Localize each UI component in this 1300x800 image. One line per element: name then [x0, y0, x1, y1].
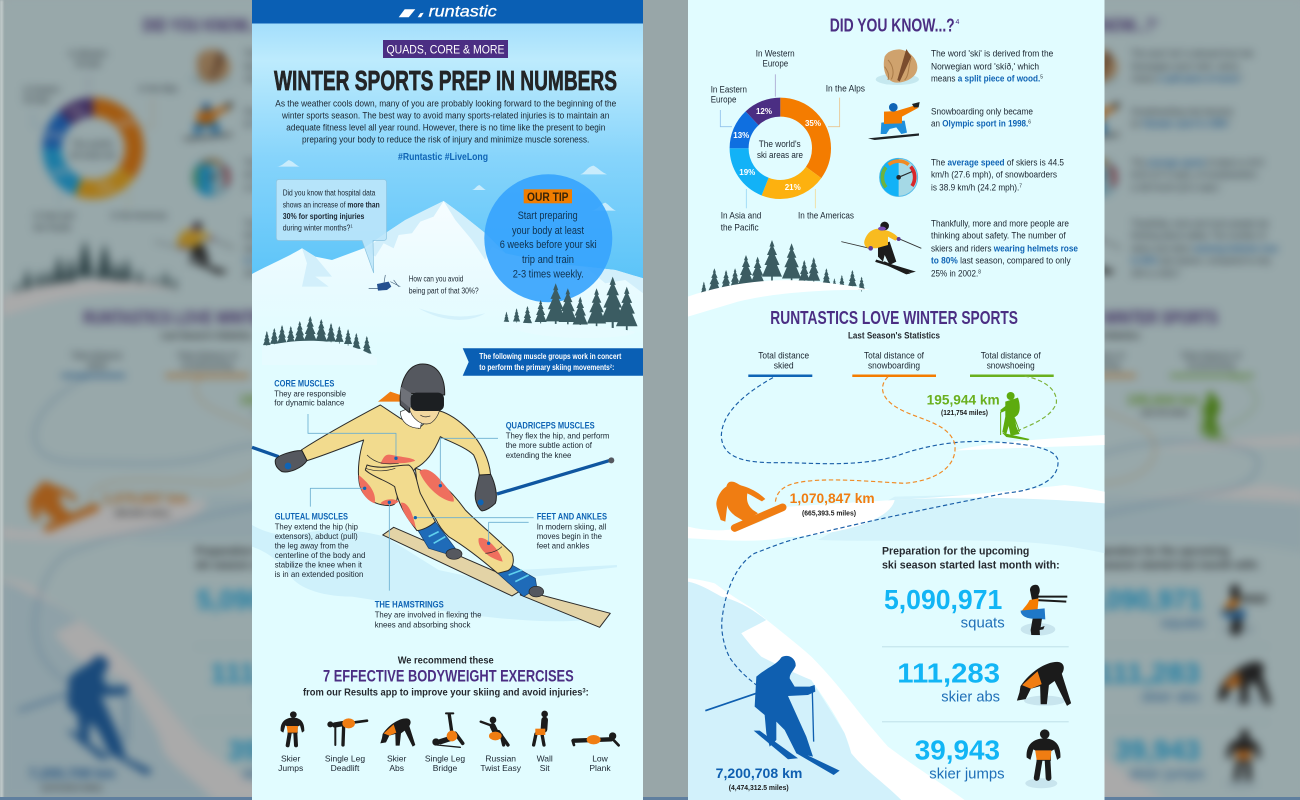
exercise labels: Abs [389, 763, 404, 773]
heading: recommended exercises: We recommend these [398, 655, 494, 667]
label: feet and ankles: FEET AND ANKLES [537, 512, 607, 523]
fact: helmets: Thankfully, more and more people are [931, 219, 1069, 229]
title: did you know: 4 [956, 19, 960, 26]
chart: ski areas donut: 12% [756, 107, 772, 116]
icon: snowboarder [868, 102, 920, 140]
stat: squats: 5,090,971 [884, 584, 1002, 615]
fact: origin of ski: The word 'ski' is derived from the [931, 49, 1053, 59]
fact: origin of ski [931, 49, 1053, 84]
fact: helmets: 8 [978, 269, 981, 275]
text: preparation heading: Preparation for the upcoming [882, 546, 1029, 558]
banner: muscle groups: : [612, 363, 614, 372]
banner: muscle groups: The following muscle groups work in concert [479, 352, 622, 361]
distance category labels: skied [774, 361, 794, 371]
fact: helmets: skiers and riders wearing helmets rose [931, 244, 1078, 254]
exercise labels: Skier [387, 754, 407, 764]
icon: snowboarder silhouette [716, 482, 783, 528]
fact: olympic sport: 6 [1028, 120, 1031, 126]
banner: muscle groups [463, 348, 643, 376]
exercise labels: Single Leg [425, 754, 465, 764]
exercise labels [278, 754, 611, 773]
text: preparation heading [882, 546, 1060, 572]
figure: single leg deadlift [328, 718, 367, 745]
exercise labels: Low [592, 754, 609, 764]
chart: ski areas donut: 35% [805, 119, 821, 128]
label: feet and ankles [537, 512, 607, 551]
panel: our tip circle: 2-3 times weekly. [513, 269, 584, 281]
skis [383, 527, 610, 627]
stat: snowshoeing distance: 195,944 km [927, 392, 1000, 407]
fact: average speed: 7 [1019, 184, 1022, 190]
chart: ski areas donut: 21% [785, 183, 801, 192]
stat: snowshoeing distance [927, 392, 1000, 417]
label: gluteal muscles: is in an extended position [275, 569, 364, 579]
icon: big skier silhouette [705, 656, 840, 775]
label: gluteal muscles [275, 512, 366, 579]
icon: snowshoer silhouette [1000, 392, 1030, 440]
logo: runtastic [399, 4, 497, 21]
stat: snowboarding distance: 1,070,847 km [790, 491, 875, 506]
panel: our tip circle: Start preparing [518, 210, 578, 222]
chart: ski areas donut: The world's [759, 139, 801, 149]
intro paragraph: preparing your body to reduce the risk of injury and minimize muscle soreness. [302, 135, 589, 145]
stat: skiing distance [716, 766, 802, 792]
label: gluteal muscles: They extend the hip (hip [275, 522, 358, 532]
callout: hospital data bubble [276, 180, 386, 273]
badge: quads, core and more: QUADS, CORE & MORE [386, 42, 504, 56]
fact: olympic sport [931, 107, 1033, 129]
scene: mountains and clouds [252, 160, 643, 347]
label: the hamstrings: They are involved in flexing the [375, 610, 482, 620]
snow shadow [252, 525, 585, 621]
donut labels and leaders: the Pacific [721, 223, 759, 233]
exercise labels: Jumps [278, 763, 303, 773]
icon: helmeted skier [841, 222, 921, 274]
fact: average speed: is 38.9 km/h (24.2 mph). [931, 183, 1028, 193]
intro paragraph: As the weather cools down, many of you are probably looking forward to the beginning of the [275, 99, 616, 109]
illustration: skier with muscle groups [252, 364, 617, 627]
exercise labels: Twist Easy [480, 763, 522, 773]
stat: skier abs [897, 658, 1000, 705]
distance category labels: Total distance of [864, 351, 924, 361]
stat: skier jumps: 39,943 [915, 734, 1000, 765]
hashtags: #Runtastic #LiveLong [398, 152, 488, 163]
exercise labels: Deadlift [331, 763, 360, 773]
stat: skiing distance: 7,200,708 km [716, 766, 802, 781]
icon: skier jumps figure [1025, 729, 1060, 788]
stat: skier abs: skier abs [941, 689, 1000, 705]
label: core muscles [274, 379, 346, 408]
donut labels and leaders: In the Alps [826, 84, 865, 94]
chart: ski areas donut: 19% [739, 168, 755, 177]
stat: snowboarding distance [790, 491, 875, 518]
exercise labels: Skier [281, 754, 301, 764]
muscle highlights [359, 455, 503, 562]
exercise labels: Sit [540, 763, 550, 773]
label: core muscles: CORE MUSCLES [274, 379, 334, 390]
icon: split wood [876, 49, 919, 85]
label: core muscles: They are responsible [274, 389, 346, 399]
intro paragraph: winter sports season. The best way to avoid many sports-related injuries is to maintain an [281, 111, 609, 121]
panel: our tip circle: your body at least [512, 225, 584, 237]
callout: hospital data bubble: 30% for sporting injuries [283, 212, 365, 221]
fact: origin of ski: 5 [1040, 75, 1043, 81]
donut labels and leaders: In the Americas [798, 211, 854, 221]
donut labels and leaders: Europe [711, 95, 736, 105]
bent leg [365, 465, 435, 531]
figure: wall sit [534, 711, 548, 745]
distance category labels: Total distance [758, 351, 809, 361]
trees: right cluster [504, 277, 638, 338]
chart: ski areas donut: 13% [733, 131, 749, 140]
label: quadriceps muscles [506, 421, 609, 460]
stat: skier abs: 111,283 [897, 658, 1000, 689]
icon: squat figure [1021, 585, 1067, 636]
text: preparation heading: ski season started last month with: [882, 560, 1060, 572]
figure: skier abs [380, 718, 415, 747]
label: the hamstrings [375, 600, 482, 630]
stat: skier jumps: skier jumps [929, 766, 1005, 782]
fact: average speed [931, 158, 1064, 193]
donut labels and leaders: In Eastern [711, 85, 747, 95]
label: feet and ankles: feet and ankles [537, 541, 589, 551]
label: gluteal muscles: the leg away from the [275, 541, 349, 551]
chart: ski areas donut: ski areas are [757, 150, 803, 160]
heading: recommended exercises [303, 655, 589, 699]
ski poles [252, 447, 614, 494]
callout: hospital data bubble: shows an increase of more than [283, 200, 380, 209]
donut labels and leaders [711, 49, 865, 233]
callout: hospital data bubble: Did you know that hospital data [283, 189, 376, 198]
connector lines [308, 414, 534, 591]
label: the hamstrings: THE HAMSTRINGS [375, 600, 444, 611]
heading: recommended exercises: : [586, 687, 589, 699]
stat: skiing distance: (4,474,312.5 miles) [729, 785, 789, 792]
heading: recommended exercises: 7 EFFECTIVE BODYWEIGHT EXERCISES [323, 668, 574, 686]
fact: origin of ski: Norwegian word 'skíð,' which [931, 62, 1039, 72]
label: gluteal muscles: centerline of the body and [275, 550, 366, 560]
label: gluteal muscles: extensors), abduct (pull) [275, 531, 358, 541]
sky background [252, 23, 643, 293]
fact: helmets [931, 219, 1078, 278]
title: did you know: DID YOU KNOW...? [830, 15, 955, 36]
header band [252, 0, 643, 24]
stat: skier jumps [915, 734, 1005, 782]
exercise labels: Single Leg [325, 754, 365, 764]
heading: runtastics love winter sports [770, 308, 1018, 341]
heading: runtastics love winter sports: Last Season's Statistics [848, 331, 940, 341]
panel: our tip circle: OUR TIP [527, 190, 568, 204]
fact: helmets: 25% in 2002. [931, 268, 984, 278]
banner: muscle groups: 2 [610, 364, 612, 370]
trees: right panel cluster with snow crest [688, 240, 870, 317]
distance category labels: Total distance of [981, 351, 1041, 361]
banner: muscle groups: to perform the primary skiing movements [479, 363, 637, 372]
panel: right, did you know and statistics [688, 0, 1105, 800]
divider [882, 646, 1069, 647]
stat: squats [884, 584, 1005, 631]
intro paragraph [275, 99, 616, 145]
distance category labels: snowshoeing [987, 361, 1035, 371]
icons: did you know facts [841, 49, 921, 274]
panel: our tip circle: trip and train [522, 254, 574, 266]
label: feet and ankles: In modern skiing, all [537, 522, 607, 532]
exercise labels: Plank [589, 763, 611, 773]
snow background shapes [688, 435, 1105, 800]
heading: runtastics love winter sports: RUNTASTICS LOVE WINTER SPORTS [770, 308, 1018, 328]
text: avoid being part: being part of that 30%? [409, 286, 479, 295]
exercise labels: Bridge [433, 763, 458, 773]
label: gluteal muscles: GLUTEAL MUSCLES [275, 512, 348, 523]
icon: fallen skier [369, 275, 400, 291]
chart: ski areas donut [733, 107, 822, 192]
distance category labels: snowboarding [868, 361, 920, 371]
label: feet and ankles: moves begin in the [537, 531, 602, 541]
fact: average speed: km/h (27.6 mph), of snowboarders [931, 170, 1057, 180]
boots [418, 522, 537, 597]
fact: helmets: to 80% last season, compared to only [931, 256, 1071, 266]
gloves [275, 451, 307, 472]
panel: our tip circle: 6 weeks before your ski [500, 239, 597, 251]
label: quadriceps muscles: QUADRICEPS MUSCLES [506, 421, 595, 432]
donut labels and leaders: In Western [756, 49, 795, 59]
exercise labels: Russian [485, 754, 516, 764]
trees: left cluster [262, 316, 377, 365]
exercise labels: Wall [537, 754, 553, 764]
panel: left, prep in numbers [252, 0, 643, 800]
head and helmet [400, 408, 422, 428]
label: quadriceps muscles: the more subtle action of [506, 440, 593, 450]
fact: olympic sport: an Olympic sport in 1998. [931, 119, 1038, 129]
title: WINTER SPORTS PREP IN NUMBERS [274, 65, 617, 96]
dashed routes [721, 376, 1058, 685]
text: avoid being part: How can you avoid [409, 275, 463, 284]
donut labels and leaders: In Asia and [721, 211, 761, 221]
distance category labels [748, 351, 1054, 377]
intro paragraph: adequate fitness level all year round. However, there is no time like the present to begin [286, 123, 605, 133]
fact: origin of ski: means a split piece of wood. [931, 74, 1049, 84]
label: the hamstrings: knees and absorbing shock [375, 620, 471, 630]
label: core muscles: for dynamic balance [274, 398, 345, 408]
figure: skier jumps [281, 711, 304, 745]
callout: hospital data bubble: during winter months? [283, 224, 361, 233]
icon: speedometer [880, 158, 918, 196]
figure: russian twist [481, 717, 508, 745]
donut labels and leaders: Europe [762, 59, 788, 69]
fact: average speed: The average speed of skiers is 44.5 [931, 158, 1064, 168]
badge: quads, core and more [383, 40, 508, 58]
stat: snowshoeing distance: (121,754 miles) [941, 410, 988, 417]
fact: helmets: thinking about safety. The number of [931, 231, 1066, 241]
exercise figures [281, 711, 619, 747]
panel: our tip circle [484, 174, 612, 302]
extended leg [415, 468, 513, 573]
fact: olympic sport: Snowboarding only became [931, 107, 1033, 117]
label: quadriceps muscles: extending the knee [506, 450, 572, 460]
label: quadriceps muscles: They flex the hip, and perform [506, 431, 609, 441]
heading: recommended exercises: from our Results app to improve your skiing and avoid injuries [303, 687, 616, 699]
figure: single leg bridge [433, 713, 463, 747]
stat: squats: squats [961, 615, 1005, 631]
divider [882, 721, 1069, 722]
callout: hospital data bubble: 1 [350, 224, 353, 230]
figure: low plank [573, 733, 619, 745]
text: avoid being part [409, 275, 479, 295]
logo: runtastic: runtastic [429, 4, 497, 21]
torso and arms [301, 405, 491, 506]
icon: skier abs figure [1017, 662, 1071, 706]
stat: snowboarding distance: (665,393.5 miles) [802, 511, 856, 518]
label: gluteal muscles: stabilize the knee when it [275, 559, 363, 569]
heading: recommended exercises: 3 [582, 688, 586, 695]
